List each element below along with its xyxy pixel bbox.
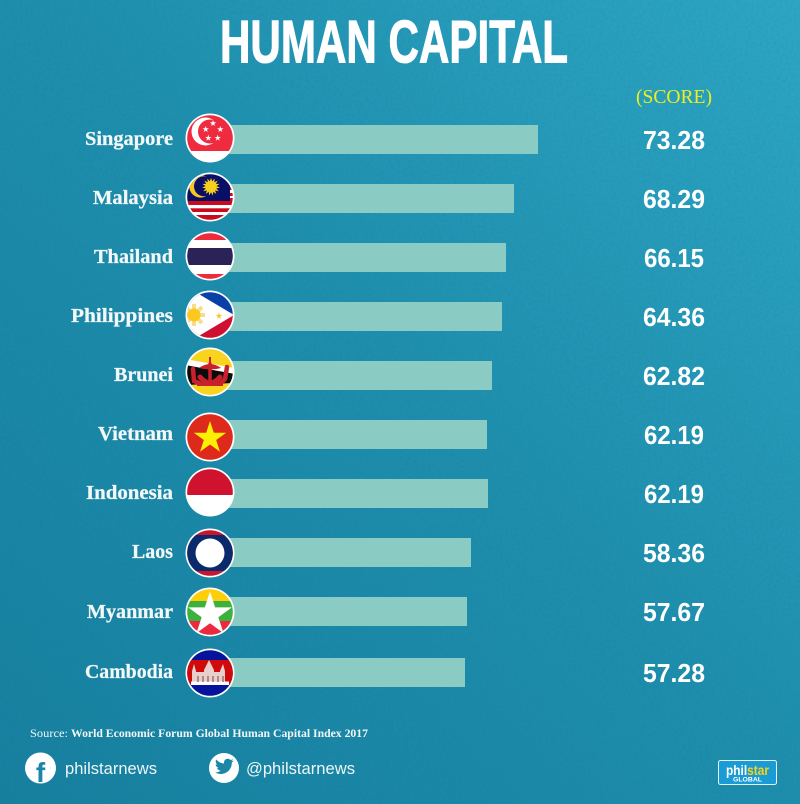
score: Singapore: 73.28 xyxy=(643,125,705,155)
bar: Laos xyxy=(225,538,471,567)
row: Indonesia xyxy=(86,467,704,516)
source line: Source: xyxy=(30,728,68,740)
score: Brunei: 62.82 xyxy=(643,361,705,391)
score: Vietnam: 62.19 xyxy=(644,420,704,450)
label: Indonesia: Indonesia xyxy=(86,483,173,504)
flag: Laos xyxy=(185,528,235,578)
label: Brunei: Brunei xyxy=(114,365,174,386)
bar: Indonesia xyxy=(225,479,488,508)
label: Cambodia: Cambodia xyxy=(85,662,173,683)
score: Malaysia: 68.29 xyxy=(643,184,705,214)
facebook handle xyxy=(25,752,157,788)
icon: twitter xyxy=(209,753,239,783)
flag: Thailand xyxy=(185,231,235,281)
flag: Singapore xyxy=(185,113,235,163)
score: Indonesia: 62.19 xyxy=(644,479,704,509)
score: Cambodia: 57.28 xyxy=(643,658,705,688)
row: Laos xyxy=(132,528,705,578)
bar: Malaysia xyxy=(225,184,514,213)
row: Philippines xyxy=(71,290,705,340)
bar: Thailand xyxy=(225,243,506,272)
label: Malaysia: Malaysia xyxy=(93,188,173,209)
flag: Philippines xyxy=(186,290,234,340)
logo: philstar global: philstar xyxy=(726,762,769,778)
row: Thailand xyxy=(94,231,704,281)
label: Philippines: Philippines xyxy=(71,306,173,327)
twitter name: @philstarnews xyxy=(246,759,355,778)
flag: Indonesia xyxy=(185,467,235,516)
label: Myanmar: Myanmar xyxy=(87,602,173,623)
score: Myanmar: 57.67 xyxy=(643,597,705,627)
score: Thailand: 66.15 xyxy=(644,243,704,273)
source line: World Economic Forum Global Human Capital Index 2017 xyxy=(71,728,368,740)
bar: Cambodia xyxy=(225,658,465,687)
row: Cambodia xyxy=(85,648,705,698)
score column heading: (SCORE) xyxy=(636,86,712,108)
row: Malaysia xyxy=(93,172,705,222)
logo: philstar global xyxy=(718,760,776,784)
label: Thailand: Thailand xyxy=(94,247,173,268)
title: HUMAN CAPITAL xyxy=(220,9,568,76)
flag: Vietnam xyxy=(186,412,234,462)
facebook name: philstarnews xyxy=(65,759,157,778)
label: Laos: Laos xyxy=(132,542,173,563)
bar: Brunei xyxy=(225,361,492,390)
flag: Malaysia xyxy=(185,172,235,222)
row: Myanmar xyxy=(87,587,705,637)
twitter handle xyxy=(209,753,355,783)
bar: Vietnam xyxy=(225,420,487,449)
row: Vietnam xyxy=(98,412,704,462)
flag: Cambodia xyxy=(185,648,235,698)
score: Philippines: 64.36 xyxy=(643,302,705,332)
icon: facebook: f xyxy=(36,757,46,788)
bar: Philippines xyxy=(225,302,502,331)
label: Singapore: Singapore xyxy=(85,129,173,150)
flag: Myanmar xyxy=(185,587,235,637)
bar: Myanmar xyxy=(225,597,467,626)
bar: Singapore xyxy=(225,125,538,154)
logo: philstar global: GLOBAL xyxy=(733,778,762,784)
score: Laos: 58.36 xyxy=(643,538,705,568)
row: Brunei xyxy=(114,347,705,397)
row: Singapore xyxy=(85,113,705,163)
flag: Brunei xyxy=(185,347,235,397)
label: Vietnam: Vietnam xyxy=(98,424,173,445)
